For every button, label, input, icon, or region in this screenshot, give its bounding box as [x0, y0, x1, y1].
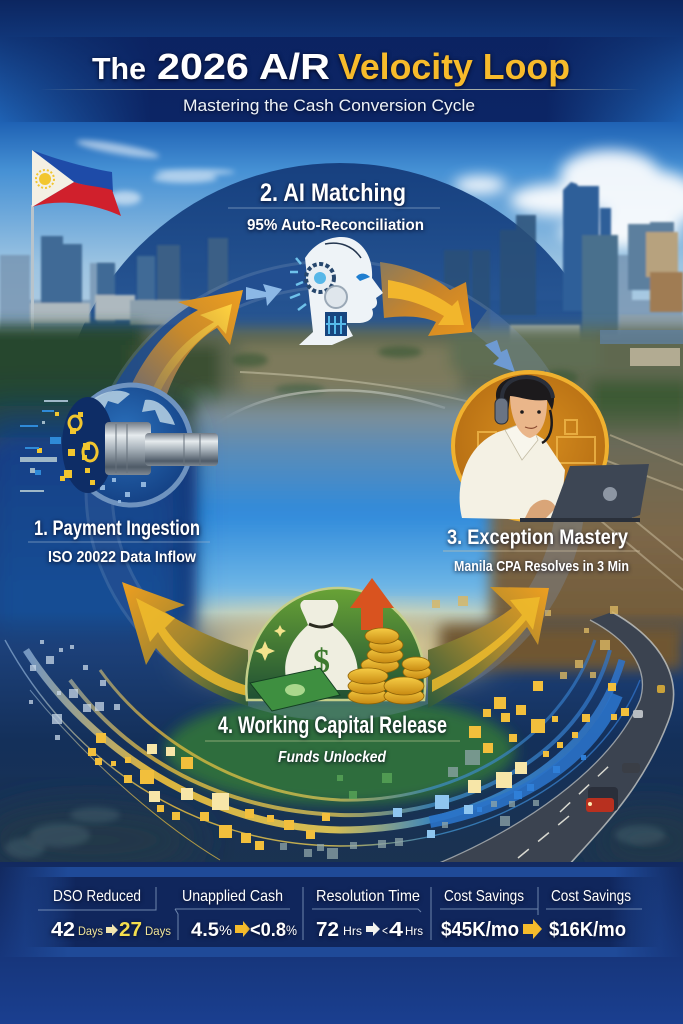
stat: resolution time: < [382, 923, 388, 938]
panel: step 1 payment ingestion [20, 385, 218, 566]
arrow: small blue direction to step 3 [485, 340, 515, 372]
heading: AI Matching: 2. AI Matching [260, 179, 406, 207]
heading: working capital release: 4. Working Capital Release [218, 712, 447, 739]
icon: money bag, coins and growth arrow [246, 578, 431, 711]
heading: payment ingestion: 1. Payment Ingestion [34, 517, 200, 540]
panel: step 4 working capital release [205, 578, 460, 766]
title: 2026 A/R [157, 46, 330, 87]
icon: Manila CPA at laptop [453, 372, 649, 522]
stat: unapplied cash: <0.8 [250, 920, 286, 941]
dome behind the AI matching step [56, 163, 624, 447]
arrow: step 2 to step 3 [380, 262, 472, 336]
arrow: cost savings [523, 919, 542, 939]
icon: red car [586, 787, 618, 812]
panel: step 3 exception mastery [443, 372, 649, 575]
arrow: step 1 to step 2 [128, 290, 243, 397]
lower landscape [0, 612, 683, 875]
stat: cost savings before [441, 888, 524, 941]
left blue overlay [0, 395, 185, 670]
text: auto-reconciliation: 95% Auto-Reconciliation [247, 217, 424, 234]
road with highway lanes [432, 612, 674, 866]
panel: KPI stats strip [0, 867, 683, 957]
stat: resolution time: Hrs [405, 924, 423, 938]
data pixel squares [29, 596, 629, 859]
stat: unapplied cash: % [286, 922, 297, 938]
arrow: step 4 to step 1 [122, 582, 248, 706]
stat: cost savings before: Cost Savings [444, 888, 524, 905]
stat: resolution time: Resolution Time [316, 888, 420, 905]
background sky [0, 0, 683, 340]
ground and greenery [0, 325, 683, 448]
stat: DSO reduced: Days [145, 924, 171, 938]
stat: resolution time [316, 888, 423, 941]
clouds [76, 137, 683, 248]
title band [0, 37, 683, 122]
flag pole [31, 205, 34, 350]
title [92, 46, 570, 87]
velocity loop ring [99, 274, 571, 706]
heading: exception mastery: 3. Exception Mastery [447, 526, 628, 549]
panel: step 2 AI matching [228, 179, 440, 345]
stat: resolution time: 4 [389, 919, 404, 941]
right side city and rail ground [475, 405, 683, 660]
icon: globe and pipe [20, 385, 218, 505]
skyline: far [0, 238, 683, 330]
stat: DSO reduced: 27 [119, 919, 142, 941]
stat: DSO reduced: DSO Reduced [53, 888, 141, 905]
title: Velocity Loop [338, 46, 570, 87]
icon: Philippine flag [32, 150, 121, 216]
stat: unapplied cash: Unapplied Cash [182, 888, 283, 905]
text: ISO 20022: ISO 20022 Data Inflow [48, 549, 196, 566]
stat: resolution time: Hrs [343, 924, 362, 938]
skyline: near [30, 182, 683, 345]
bottom background [0, 862, 683, 1024]
swoosh data streams [5, 640, 640, 860]
text: funds unlocked: Funds Unlocked [278, 749, 387, 766]
icon: money bag, coins and growth arrow: $ [313, 643, 330, 680]
text: Manila CPA resolves: Manila CPA Resolves in 3 Min [454, 558, 629, 575]
stat: resolution time: 72 [316, 919, 339, 941]
stat: cost savings after: $16K/mo [549, 919, 626, 941]
arrow: small blue direction to step 2 [246, 284, 282, 306]
stat: unapplied cash [182, 888, 297, 941]
stat: cost savings after: Cost Savings [551, 888, 631, 905]
stat: cost savings after [549, 888, 631, 941]
arrow: step 3 to step 4 [428, 587, 549, 708]
subtitle: Mastering the Cash Conversion Cycle [183, 96, 475, 115]
icon: AI robot head [290, 237, 383, 345]
river water [195, 385, 490, 670]
stat: DSO reduced [51, 888, 171, 941]
stat: cost savings before: $45K/mo [441, 919, 519, 941]
stat: DSO reduced: Days [78, 924, 103, 938]
stat: DSO reduced: 42 [51, 919, 75, 941]
stat: unapplied cash: 4.5 [191, 920, 219, 941]
stat: unapplied cash: % [219, 922, 232, 938]
title: The [92, 51, 146, 86]
